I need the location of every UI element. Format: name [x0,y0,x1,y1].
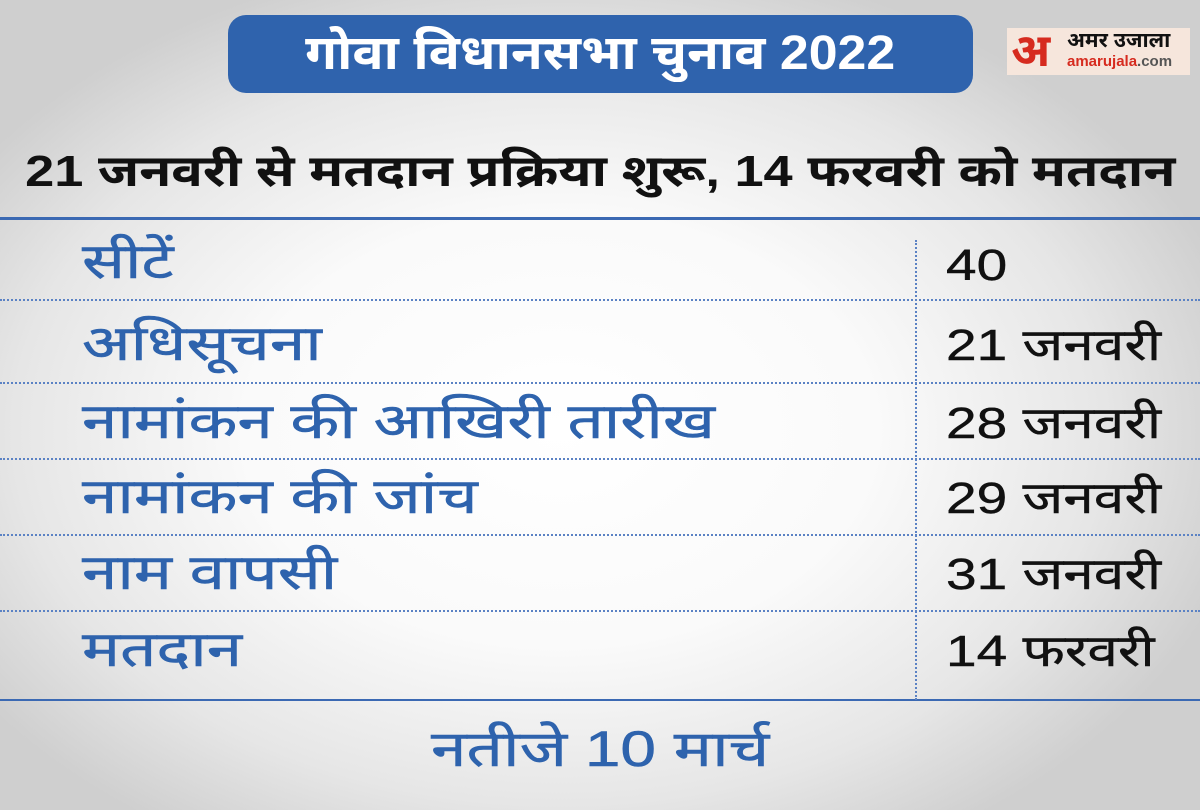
subtitle: 21 जनवरी से मतदान प्रक्रिया शुरू, 14 फरवरी को मतदान [25,147,1175,196]
row: scrutiny [82,468,1162,524]
row: polling: मतदान [82,623,242,677]
footer: results: नतीजे 10 मार्च [431,721,769,777]
row: nomination last date [82,394,1162,449]
logo text: अमर उजाला [1067,29,1170,52]
row: notification [82,316,1162,374]
row: scrutiny: नामांकन की जांच [82,470,478,524]
row: seats: 40 [946,241,1007,290]
row: notification: अधिसूचना [82,317,322,371]
row: seats: सीटें [82,235,174,289]
logo url: amarujala.com [1067,53,1172,70]
row: polling: 14 फरवरी [946,627,1155,676]
row: nomination last date: 28 जनवरी [946,399,1161,448]
title banner: गोवा विधानसभा चुनाव 2022 [305,27,896,80]
logo mark: अ [1011,24,1050,76]
row: seats [82,234,1007,290]
row: scrutiny: 29 जनवरी [946,474,1161,523]
row: notification: 21 जनवरी [946,321,1161,370]
table: schedule [82,234,1162,677]
logo [1007,28,1190,75]
row: withdrawal: 31 जनवरी [946,550,1161,599]
row: nomination last date: नामांकन की आखिरी तारीख [82,395,715,449]
row: withdrawal [82,544,1162,600]
row: withdrawal: नाम वापसी [82,546,337,600]
title banner [228,15,973,93]
row: polling [82,623,1156,677]
